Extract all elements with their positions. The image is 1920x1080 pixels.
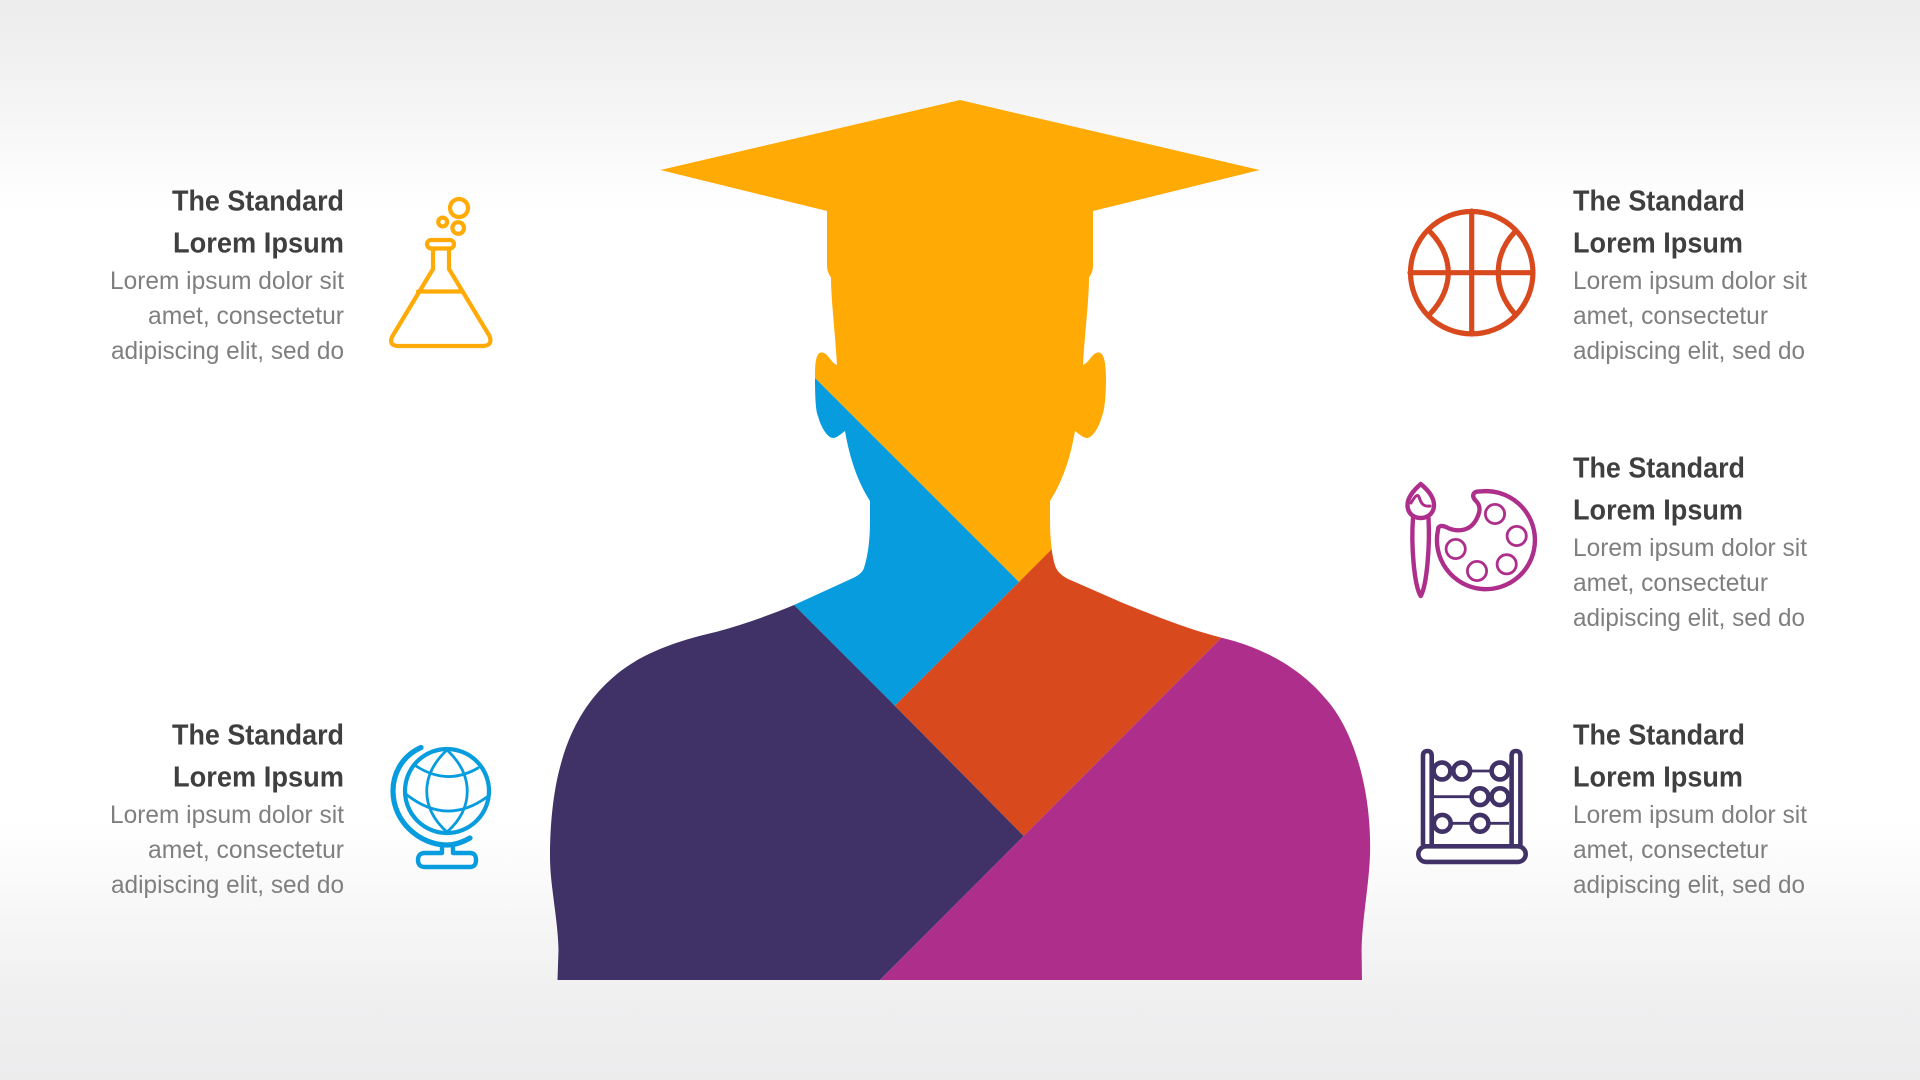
- text block: adipiscing elit, sed do: [1573, 871, 1805, 899]
- heading: [1573, 186, 1745, 260]
- text block: Lorem ipsum dolor sit: [1573, 534, 1807, 562]
- segment: navy left shoulder: [550, 605, 1024, 980]
- heading: The Standard: [1573, 186, 1745, 218]
- text block: Lorem ipsum dolor sit: [1573, 267, 1807, 295]
- panel: middle right: [1408, 452, 1807, 632]
- text block: amet, consectetur: [1573, 302, 1768, 330]
- icon: palette and brush: [1408, 484, 1535, 596]
- heading: [172, 720, 344, 794]
- text block: [110, 267, 344, 365]
- icon: abacus: [1418, 751, 1526, 862]
- segment: purple right shoulder: [880, 638, 1370, 980]
- text block: amet, consectetur: [148, 302, 344, 330]
- text block: adipiscing elit, sed do: [111, 871, 344, 899]
- text block: Lorem ipsum dolor sit: [1573, 801, 1807, 829]
- icon: flask: [391, 199, 490, 346]
- icon: globe: [393, 748, 489, 867]
- heading: [1573, 720, 1745, 794]
- text block: Lorem ipsum dolor sit: [110, 801, 344, 829]
- segment: blue neck: [794, 378, 1019, 706]
- text block: adipiscing elit, sed do: [1573, 604, 1805, 632]
- heading: Lorem Ipsum: [173, 228, 344, 260]
- panel: top left: [110, 186, 490, 365]
- panel: top right: [1410, 186, 1807, 365]
- panel: bottom left: [110, 720, 489, 899]
- heading: Lorem Ipsum: [1573, 228, 1743, 260]
- heading: [1573, 452, 1745, 526]
- graduate silhouette figure: [530, 80, 1380, 980]
- text block: amet, consectetur: [1573, 836, 1768, 864]
- heading: Lorem Ipsum: [173, 762, 344, 794]
- segment: yellow cap and face: [660, 100, 1260, 582]
- heading: The Standard: [172, 186, 344, 218]
- text block: adipiscing elit, sed do: [111, 337, 344, 365]
- icon: basketball: [1410, 211, 1533, 334]
- text block: amet, consectetur: [148, 836, 344, 864]
- text block: adipiscing elit, sed do: [1573, 337, 1805, 365]
- heading: The Standard: [1573, 720, 1745, 752]
- panel: bottom right: [1418, 720, 1807, 899]
- heading: The Standard: [1573, 452, 1745, 484]
- text block: Lorem ipsum dolor sit: [110, 267, 344, 295]
- text block: [1573, 534, 1807, 632]
- text block: [1573, 267, 1807, 365]
- segment: orange collar: [894, 549, 1222, 836]
- heading: Lorem Ipsum: [1573, 762, 1743, 794]
- heading: The Standard: [172, 720, 344, 752]
- heading: Lorem Ipsum: [1573, 494, 1743, 526]
- text block: [110, 801, 344, 899]
- heading: [172, 186, 344, 260]
- text block: amet, consectetur: [1573, 569, 1768, 597]
- text block: [1573, 801, 1807, 899]
